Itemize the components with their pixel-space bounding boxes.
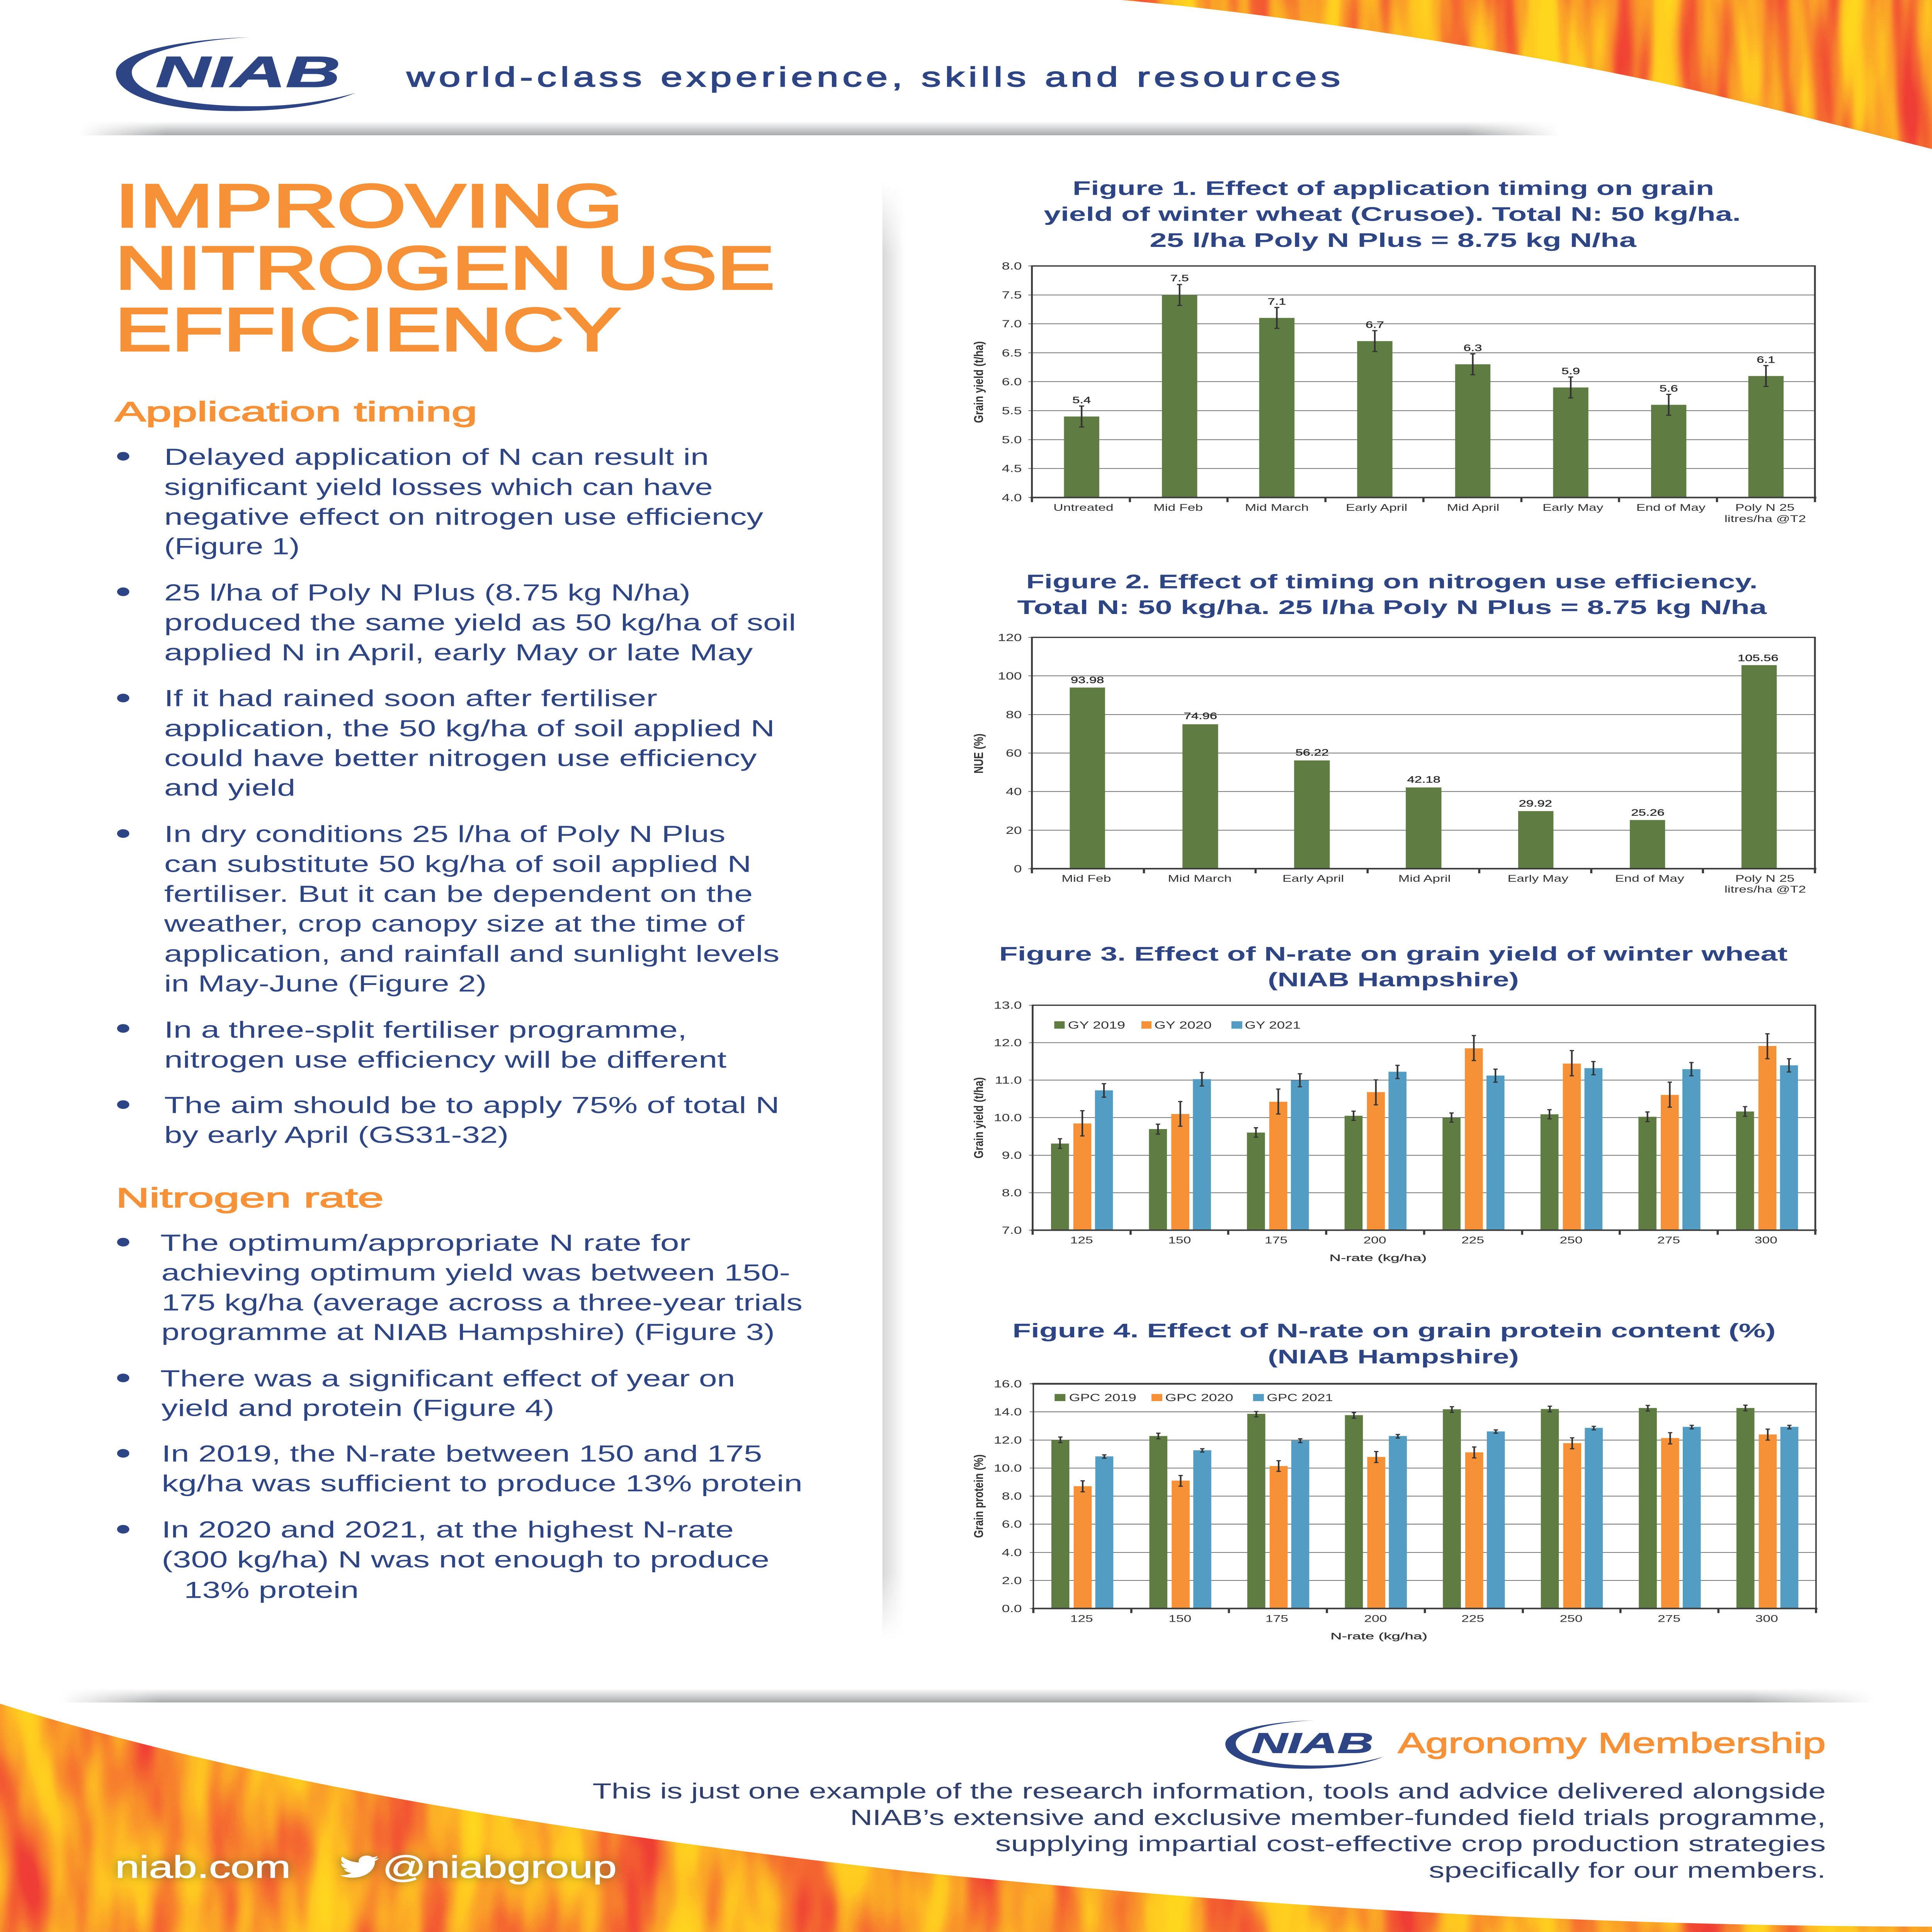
bullet 10: 13% protein [184,1577,359,1603]
bullet 4: application, and rainfall and sunlight levels [164,940,779,967]
bullet 5 [117,1017,727,1073]
bullet 6: by early April (GS31-32) [164,1122,509,1148]
panel: figure 2 [972,571,1816,895]
grouped bar chart: grain protein by N-rate: 275 [1658,1614,1680,1624]
footer text block [592,1779,1826,1883]
bar chart: grain yield by timing: Grain yield (t/ha) [972,341,986,423]
figure 1 title: yield of winter wheat (Crusoe). Total N: 50 kg/ha. [1044,203,1741,225]
grouped bar chart: grain yield by N-rate: 225 [1461,1235,1484,1246]
bullet 10 [117,1516,769,1603]
bar chart: grain yield by timing: 7.0 [1002,318,1022,330]
bar chart: nitrogen use efficiency: 100 [998,670,1022,682]
bullet 10: In 2020 and 2021, at the highest N-rate [162,1516,734,1543]
grouped bar chart: grain yield by N-rate: 8.0 [1002,1187,1022,1199]
bar chart: grain yield by timing [972,260,1816,524]
grouped bar chart: grain protein by N-rate: 150 [1168,1614,1191,1624]
grouped bar chart: grain protein by N-rate: 300 [1755,1614,1778,1624]
bullet 8 [117,1365,735,1421]
bar chart: grain yield by timing: 5.9 [1561,366,1580,376]
bar chart: grain yield by timing: 6.1 [1757,355,1775,365]
bullet 4: fertiliser. But it can be dependent on the [164,881,753,907]
bar chart: grain yield by timing: 6.5 [1002,347,1022,359]
header shadow band [80,121,1559,135]
grouped bar chart: grain protein by N-rate: 225 [1461,1614,1484,1624]
grouped bar chart: grain yield by N-rate: N-rate (kg/ha) [1330,1253,1427,1263]
agronomy membership heading: Agronomy Membership [1398,1727,1826,1759]
bullet 1: (Figure 1) [164,533,300,560]
bar chart: nitrogen use efficiency: Early May [1508,873,1569,884]
grouped bar chart: grain protein by N-rate: 8.0 [1002,1491,1022,1502]
background image: wheat bottom left [0,1702,1932,1932]
footer shadow band [61,1689,1873,1702]
bullet 5: In a three-split fertiliser programme, [164,1017,687,1043]
bullet 3: If it had rained soon after fertiliser [164,685,657,711]
grouped bar chart: grain yield by N-rate: 275 [1657,1235,1680,1246]
grouped bar chart: grain protein by N-rate: 125 [1070,1614,1093,1624]
bar chart: grain yield by timing: Early April [1346,502,1407,513]
tagline: world-class experience, skills and resources [406,62,1340,93]
bar chart: grain yield by timing: End of May [1636,502,1706,513]
bar chart: nitrogen use efficiency: Poly N 25 [1735,873,1794,884]
bar chart: nitrogen use efficiency: 29.92 [1519,798,1552,809]
background image: wheat top right [1117,0,1932,153]
footer text block: NIAB’s extensive and exclusive member-funded field trials programme, [850,1805,1826,1830]
bullet 6: The aim should be to apply 75% of total N [164,1092,779,1118]
grouped bar chart: grain yield by N-rate: 13.0 [994,1000,1022,1011]
footer text block: This is just one example of the research information, tools and advice delivered alongside [592,1779,1826,1803]
legend [1054,1392,1333,1403]
bullet 10: (300 kg/ha) N was not enough to produce [162,1546,769,1573]
legend: GY 2019 [1068,1020,1125,1031]
legend: GY 2021 [1245,1020,1301,1031]
bullet 2 [117,579,796,665]
bar chart: grain yield by timing: 4.0 [1002,492,1022,503]
grouped bar chart: grain yield by N-rate: 125 [1070,1235,1093,1246]
grouped bar chart: grain yield by N-rate: 11.0 [995,1075,1022,1086]
grouped bar chart: grain yield by N-rate: Grain yield (t/ha) [972,1077,986,1158]
logo: NIAB header: NIAB [156,48,340,96]
grouped bar chart: grain protein by N-rate: 16.0 [994,1378,1022,1389]
bullet 3: and yield [164,774,295,801]
grouped bar chart: grain yield by N-rate: 9.0 [1002,1150,1022,1161]
bullet 4 [117,821,779,997]
legend [1054,1020,1301,1031]
grouped bar chart: grain yield by N-rate: 150 [1168,1235,1191,1246]
bar chart: nitrogen use efficiency: 25.26 [1631,808,1665,818]
panel: figure 1 [972,177,1816,524]
bar chart: nitrogen use efficiency: 0 [1014,863,1022,874]
bullet 8: There was a significant effect of year on [160,1365,735,1391]
column divider shadow [883,184,905,1638]
bar chart: nitrogen use efficiency: 80 [1006,709,1022,720]
bullet list: application timing [117,444,796,1148]
bullet 3: could have better nitrogen use efficiency [164,745,757,771]
bar chart: nitrogen use efficiency: Mid April [1398,873,1451,884]
bullet 9 [117,1440,803,1497]
figure 4 title: (NIAB Hampshire) [1268,1346,1519,1368]
bar chart: grain yield by timing: 5.5 [1002,405,1022,417]
bar chart: grain yield by timing: 7.5 [1170,273,1189,284]
bar chart: grain yield by timing: Mid Feb [1153,502,1203,513]
bar chart: grain yield by timing: litres/ha @T2 [1725,514,1806,524]
website and social contact: niab.com [115,1850,291,1884]
figure 1 title: Figure 1. Effect of application timing on grain [1073,177,1714,199]
bar chart: nitrogen use efficiency: 120 [998,632,1022,643]
bar chart: nitrogen use efficiency: Mid March [1168,873,1232,884]
grouped bar chart: grain protein by N-rate: 10.0 [994,1463,1022,1474]
figure 2 title [1017,571,1767,618]
bullet 8: yield and protein (Figure 4) [162,1395,554,1421]
grouped bar chart: grain protein by N-rate: 6.0 [1002,1519,1022,1530]
bar chart: nitrogen use efficiency: Early April [1282,873,1344,884]
footer text block: specifically for our members. [1429,1858,1826,1883]
bar chart: nitrogen use efficiency: 74.96 [1184,711,1217,721]
bar chart: grain yield by timing: Early May [1543,502,1604,513]
bullet 2: produced the same yield as 50 kg/ha of soil [164,609,796,636]
panel: figure 4 [972,1320,1818,1641]
bar chart: nitrogen use efficiency: End of May [1615,873,1684,884]
bullet 4: in May-June (Figure 2) [164,970,486,997]
bar chart: grain yield by timing: 6.7 [1366,320,1384,330]
grouped bar chart: grain protein by N-rate: 0.0 [1002,1603,1022,1614]
bar chart: nitrogen use efficiency [972,632,1816,895]
bullet 4: In dry conditions 25 l/ha of Poly N Plus [164,821,725,847]
logo: NIAB footer: NIAB [1252,1728,1373,1759]
bullet 6 [117,1092,779,1148]
bullet 3: application, the 50 kg/ha of soil applied N [164,715,775,741]
bullet 7: programme at NIAB Hampshire) (Figure 3) [162,1319,775,1345]
figure 3 title: Figure 3. Effect of N-rate on grain yield of winter wheat [999,943,1787,965]
bullet 4: can substitute 50 kg/ha of soil applied N [164,851,751,877]
bar chart: nitrogen use efficiency: NUE (%) [972,733,986,774]
grouped bar chart: grain protein by N-rate: 200 [1364,1614,1387,1624]
bullet 1: Delayed application of N can result in [164,444,709,470]
grouped bar chart: grain protein by N-rate: 4.0 [1002,1547,1022,1558]
bullet 1: significant yield losses which can have [164,474,713,500]
bullet list: nitrogen rate [117,1230,803,1603]
bar chart: nitrogen use efficiency: 93.98 [1071,675,1104,685]
figure 4 title: Figure 4. Effect of N-rate on grain protein content (%) [1012,1320,1776,1342]
bullet 7 [117,1230,803,1345]
figure 2 title: Figure 2. Effect of timing on nitrogen use efficiency. [1026,571,1758,593]
grouped bar chart: grain protein by N-rate: Grain protein (%) [972,1454,986,1538]
figure 2 title: Total N: 50 kg/ha. 25 l/ha Poly N Plus = 8.75 kg N/ha [1017,596,1767,618]
bar chart: grain yield by timing: Mid April [1447,502,1499,513]
bar chart: nitrogen use efficiency: Mid Feb [1061,873,1111,884]
panel: figure 3 [972,943,1817,1263]
bar chart: nitrogen use efficiency: 42.18 [1407,774,1440,785]
bullet 9: In 2019, the N-rate between 150 and 175 [162,1440,762,1466]
grouped bar chart: grain yield by N-rate: 200 [1363,1235,1386,1246]
legend: GPC 2020 [1165,1392,1233,1403]
grouped bar chart: grain protein by N-rate [972,1378,1818,1641]
footer text block: supplying impartial cost-effective crop production strategies [995,1832,1826,1856]
bullet 7: The optimum/appropriate N rate for [160,1230,690,1256]
bar chart: grain yield by timing: 6.0 [1002,376,1022,388]
bar chart: grain yield by timing: 4.5 [1002,463,1022,474]
bullet 1 [117,444,763,560]
figure 4 title [1012,1320,1776,1368]
main title: EFFICIENCY [115,295,621,364]
bar chart: grain yield by timing: 7.5 [1002,289,1022,301]
bar chart: grain yield by timing: 6.3 [1464,343,1482,353]
bar chart: nitrogen use efficiency: 40 [1006,786,1022,797]
figure 1 title [1044,177,1741,251]
grouped bar chart: grain yield by N-rate [972,1000,1817,1263]
grouped bar chart: grain yield by N-rate: 12.0 [994,1037,1022,1048]
bar chart: grain yield by timing: 8.0 [1002,260,1022,272]
grouped bar chart: grain protein by N-rate: 2.0 [1002,1575,1022,1586]
heading: nitrogen rate: Nitrogen rate [116,1183,384,1213]
website and social contact: @niabgroup [383,1850,617,1884]
figure 3 title [999,943,1787,991]
bar chart: grain yield by timing: 5.6 [1660,383,1678,394]
heading: application timing: Application timing [115,396,477,427]
figure 1 title: 25 l/ha Poly N Plus = 8.75 kg N/ha [1150,229,1637,251]
legend: GPC 2021 [1267,1392,1333,1403]
legend: GPC 2019 [1069,1392,1136,1403]
bar chart: nitrogen use efficiency: 20 [1006,825,1022,836]
icon: twitter bird [340,1855,379,1878]
grouped bar chart: grain yield by N-rate: 250 [1560,1235,1583,1246]
grouped bar chart: grain yield by N-rate: 175 [1265,1235,1287,1246]
bar chart: grain yield by timing: Mid March [1245,502,1309,513]
figure 3 title: (NIAB Hampshire) [1268,969,1519,991]
bullet 7: achieving optimum yield was between 150- [162,1260,790,1286]
bullet 2: applied N in April, early May or late May [164,639,753,665]
logo: NIAB header [116,37,355,111]
bullet 7: 175 kg/ha (average across a three-year trials [162,1289,803,1315]
bar chart: nitrogen use efficiency: 105.56 [1738,653,1779,663]
website and social contact [115,1850,617,1884]
grouped bar chart: grain yield by N-rate: 10.0 [994,1112,1022,1123]
bullet 4: weather, crop canopy size at the time of [164,910,745,937]
bar chart: grain yield by timing: Poly N 25 [1735,502,1794,513]
bar chart: nitrogen use efficiency: litres/ha @T2 [1725,884,1806,895]
main title: NITROGEN USE [115,234,775,302]
bullet 3 [117,685,775,801]
bullet 2: 25 l/ha of Poly N Plus (8.75 kg N/ha) [164,579,690,605]
bullet 5: nitrogen use efficiency will be different [164,1046,727,1073]
grouped bar chart: grain protein by N-rate: 12.0 [994,1434,1022,1446]
bar chart: grain yield by timing: 5.4 [1072,395,1091,405]
grouped bar chart: grain protein by N-rate: 175 [1265,1614,1288,1624]
grouped bar chart: grain yield by N-rate: 7.0 [1002,1225,1022,1236]
legend: GY 2020 [1155,1020,1212,1031]
logo: NIAB footer [1225,1720,1383,1769]
main title [115,172,775,364]
bullet 1: negative effect on nitrogen use efficiency [164,503,763,530]
main title: IMPROVING [115,172,623,240]
bar chart: grain yield by timing: 7.1 [1267,296,1286,307]
bullet 9: kg/ha was sufficient to produce 13% protein [162,1470,803,1497]
grouped bar chart: grain protein by N-rate: N-rate (kg/ha) [1330,1631,1427,1641]
grouped bar chart: grain protein by N-rate: 14.0 [994,1406,1022,1418]
bar chart: nitrogen use efficiency: 56.22 [1296,747,1329,758]
grouped bar chart: grain protein by N-rate: 250 [1560,1614,1583,1624]
bar chart: grain yield by timing: 5.0 [1002,434,1022,446]
grouped bar chart: grain yield by N-rate: 300 [1755,1235,1777,1246]
bar chart: nitrogen use efficiency: 60 [1006,747,1022,759]
bar chart: grain yield by timing: Untreated [1053,502,1114,513]
